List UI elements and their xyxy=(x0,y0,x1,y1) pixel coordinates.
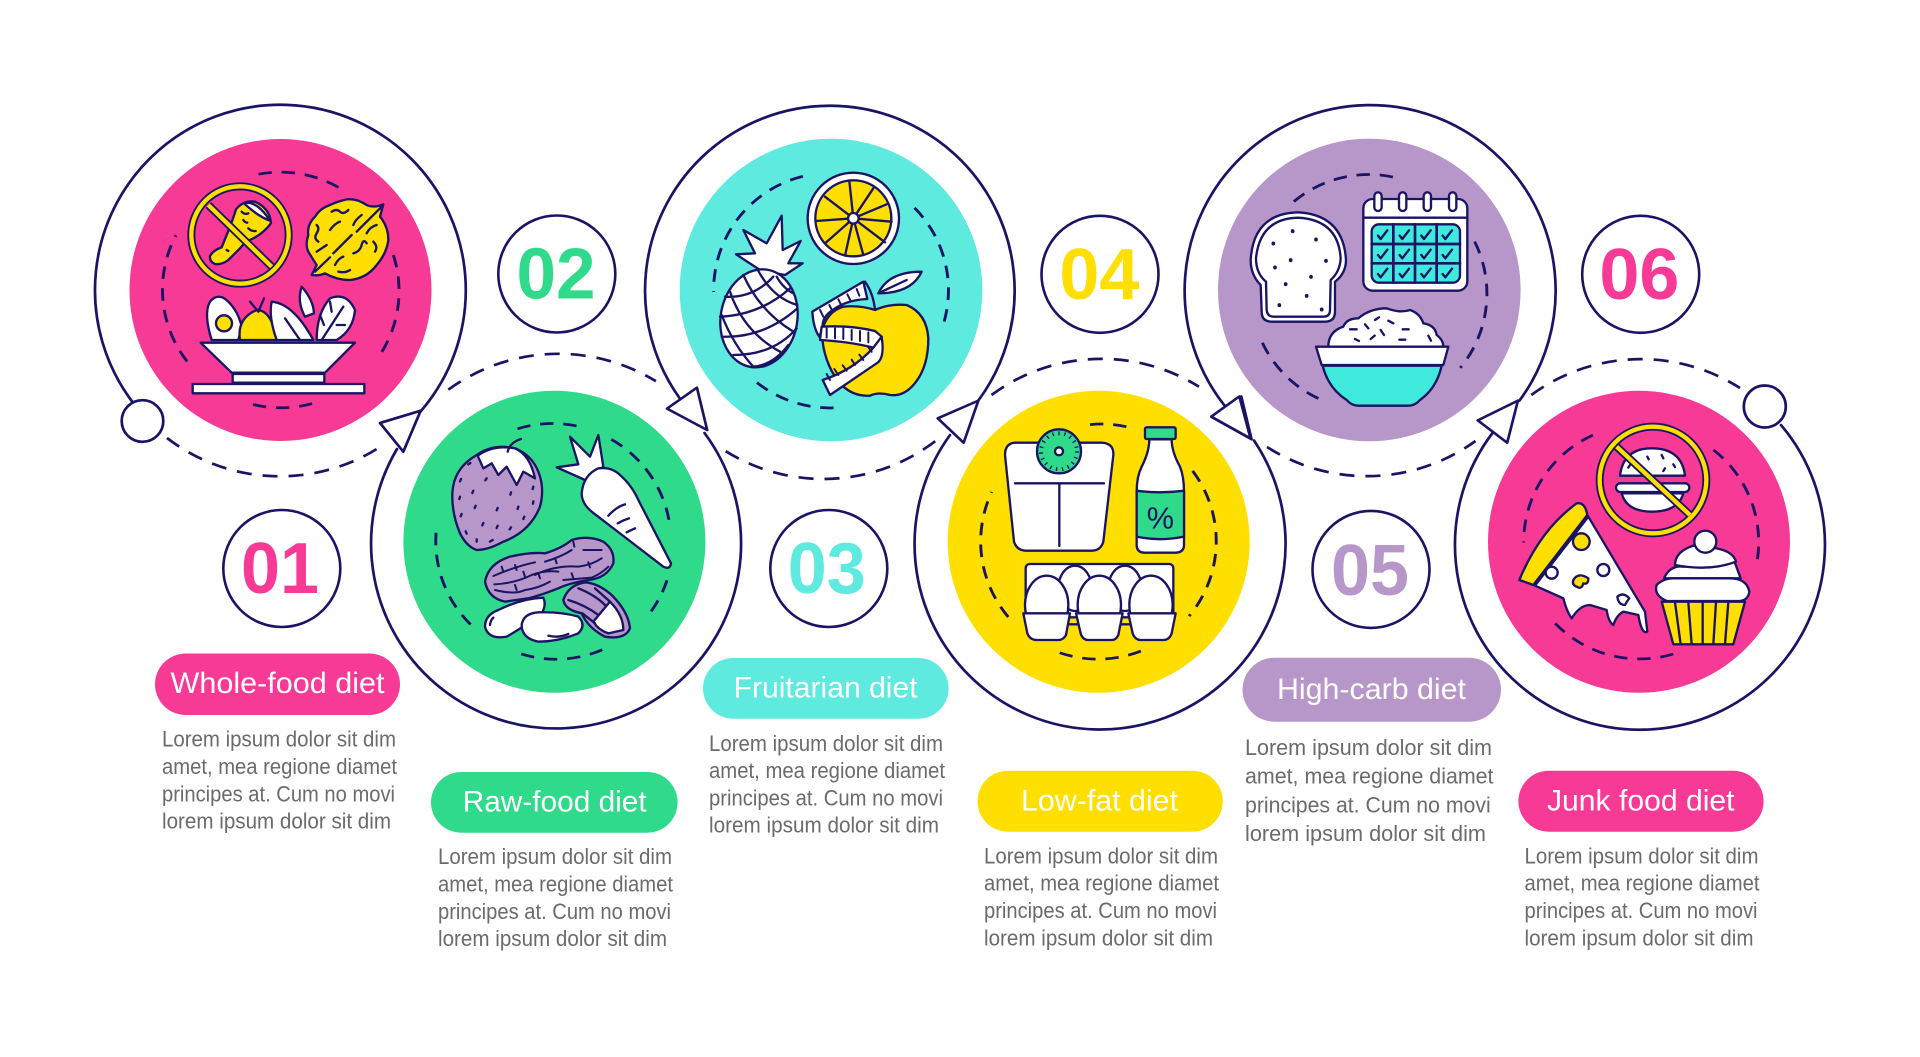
description: Lorem ipsum dolor sit dim xyxy=(984,843,1218,868)
step 04: low-fat diet xyxy=(915,216,1286,950)
description: amet, mea regione diamet xyxy=(1245,764,1494,789)
description: principes at. Cum no movi xyxy=(1245,792,1491,817)
description: principes at. Cum no movi xyxy=(162,781,395,806)
description: principes at. Cum no movi xyxy=(438,899,671,924)
ring and timeline start xyxy=(95,105,466,476)
disc: yellow xyxy=(948,391,1250,693)
ring and timeline end xyxy=(1455,359,1825,730)
step 03: fruitarian diet xyxy=(645,106,1015,838)
icon: strawberry, carrot, nuts xyxy=(452,435,671,642)
description: Lorem ipsum dolor sit dim xyxy=(1524,843,1758,868)
disc: pink xyxy=(1488,391,1790,693)
number badge 04: 04 xyxy=(1059,235,1139,315)
number badge 01: 01 xyxy=(241,529,319,609)
description xyxy=(984,843,1219,950)
description: amet, mea regione diamet xyxy=(162,754,397,779)
label pill xyxy=(978,771,1223,832)
description: principes at. Cum no movi xyxy=(1524,898,1758,923)
description: lorem ipsum dolor sit dim xyxy=(162,809,391,834)
label pill: Raw-food diet xyxy=(463,786,647,819)
label pill xyxy=(1242,658,1501,722)
number badge 02 xyxy=(498,216,615,332)
description xyxy=(438,844,673,951)
icon: scale, milk bottle, eggs: % xyxy=(1147,501,1174,535)
number badge 01 xyxy=(223,510,340,627)
description: amet, mea regione diamet xyxy=(709,758,945,783)
arrow xyxy=(1478,401,1518,443)
icon: orange slice, pineapple, apple with tape xyxy=(713,173,928,396)
number badge 02: 02 xyxy=(516,234,596,314)
number badge 05: 05 xyxy=(1331,531,1409,611)
description: Lorem ipsum dolor sit dim xyxy=(709,731,943,756)
ring xyxy=(371,354,741,728)
description: Lorem ipsum dolor sit dim xyxy=(162,727,396,752)
step 06: junk food diet xyxy=(1455,216,1825,950)
disc: green xyxy=(403,391,705,693)
icon: bread, calendar, rice bowl xyxy=(1251,192,1467,406)
description xyxy=(709,731,945,838)
disc: teal xyxy=(680,139,982,441)
label pill xyxy=(1518,771,1764,832)
label pill: Low-fat diet xyxy=(1021,785,1179,818)
dashed inner ring xyxy=(436,423,670,659)
description: lorem ipsum dolor sit dim xyxy=(1524,925,1754,950)
label pill: Fruitarian diet xyxy=(734,672,918,705)
dashed inner ring xyxy=(714,176,948,408)
number badge 06: 06 xyxy=(1599,235,1679,315)
disc: pink xyxy=(130,139,432,441)
ring xyxy=(645,106,1015,479)
arrow xyxy=(1212,396,1252,439)
description: Lorem ipsum dolor sit dim xyxy=(1245,735,1492,760)
icon: whole foods salad bowl, no meat, walnut xyxy=(191,186,388,393)
arrow xyxy=(1211,396,1251,439)
ring xyxy=(1185,105,1556,476)
description xyxy=(1245,735,1494,846)
description: principes at. Cum no movi xyxy=(984,898,1217,923)
icon: no burger, pizza, cupcake xyxy=(1519,427,1749,644)
description: lorem ipsum dolor sit dim xyxy=(1245,821,1486,846)
dashed inner ring xyxy=(162,172,399,408)
label pill: High-carb diet xyxy=(1277,673,1467,706)
description: lorem ipsum dolor sit dim xyxy=(984,925,1213,950)
description: amet, mea regione diamet xyxy=(438,872,673,897)
icon: scale, milk bottle, eggs xyxy=(1005,427,1184,640)
number badge 05 xyxy=(1312,511,1430,628)
number badge 03 xyxy=(770,510,887,627)
step 05: high-carb diet xyxy=(1185,105,1556,846)
description: lorem ipsum dolor sit dim xyxy=(438,926,667,951)
description: amet, mea regione diamet xyxy=(984,871,1219,896)
description: Lorem ipsum dolor sit dim xyxy=(438,844,672,869)
description xyxy=(1524,843,1760,950)
step 01: whole-food diet xyxy=(95,105,466,834)
dashed inner ring xyxy=(1260,175,1487,399)
number badge 06 xyxy=(1582,216,1699,333)
number badge 03: 03 xyxy=(788,529,866,609)
arrow xyxy=(380,411,421,452)
arrow xyxy=(667,388,707,430)
label pill xyxy=(703,658,949,719)
label pill xyxy=(431,772,678,833)
label pill: Whole-food diet xyxy=(170,667,385,700)
dashed inner ring xyxy=(981,424,1216,659)
description: lorem ipsum dolor sit dim xyxy=(709,813,939,838)
number badge 04 xyxy=(1042,216,1158,333)
label pill xyxy=(155,654,400,715)
ring xyxy=(915,359,1286,730)
step 02: raw-food diet xyxy=(371,216,741,951)
disc: purple xyxy=(1218,139,1521,441)
label pill: Junk food diet xyxy=(1547,785,1735,818)
arrow xyxy=(938,401,978,443)
dashed inner ring xyxy=(1524,435,1759,659)
description: principes at. Cum no movi xyxy=(709,786,943,811)
description xyxy=(162,727,397,834)
description: amet, mea regione diamet xyxy=(1524,871,1760,896)
